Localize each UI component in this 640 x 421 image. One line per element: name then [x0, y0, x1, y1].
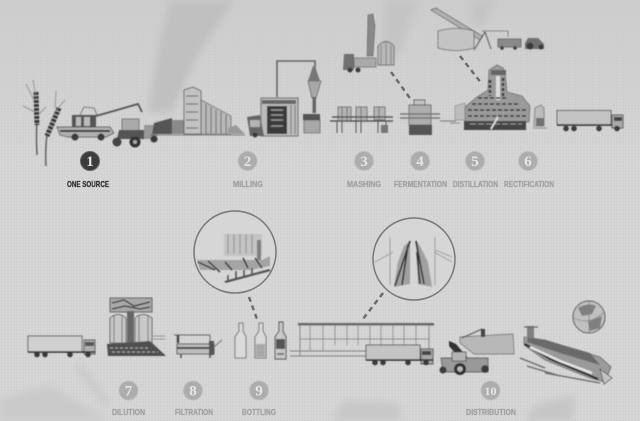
icon: labelled bottle	[275, 322, 286, 359]
step 3 badge: 3	[360, 154, 368, 170]
dashed connector: warehouse to callout	[363, 293, 383, 319]
label: distribution: DISTRIBUTION	[466, 407, 516, 417]
label: bottling: BOTTLING	[242, 407, 276, 417]
step 5 badge	[466, 152, 484, 170]
icon: grain silos	[150, 87, 245, 135]
step 2 badge	[238, 152, 257, 170]
icon: tanker truck, top row	[557, 110, 623, 131]
step 9 badge: 9	[255, 384, 263, 400]
step 10 badge: 10	[484, 384, 496, 398]
label: rectification: RECTIFICATION	[504, 179, 554, 189]
icon: truck, bottom left	[28, 336, 95, 357]
label: distillation: DISTILLATION	[453, 179, 498, 189]
label: filtration: FILTRATION	[175, 407, 213, 417]
dashed connector: bottle to callout	[249, 297, 257, 319]
top row illustrations	[23, 8, 623, 166]
icon: mill building with pipe	[247, 61, 321, 138]
label: milling: MILLING	[233, 179, 263, 189]
step 7 badge	[119, 381, 138, 400]
step 8 badge	[184, 381, 202, 400]
label: fermentation: FERMENTATION	[394, 179, 447, 189]
circle callout: warehouse racks	[373, 218, 455, 300]
icon: filtration unit	[174, 335, 222, 358]
icon: reach stacker	[440, 341, 489, 375]
icon: globe	[573, 301, 605, 333]
step 1 badge: 1	[86, 154, 94, 170]
circle callout: bottling line	[194, 211, 276, 293]
icon: wheat stalks	[23, 80, 65, 166]
step 5 badge: 5	[471, 154, 479, 170]
step 1 badge	[80, 152, 100, 170]
icon: mashing tanks	[330, 107, 393, 133]
label: mashing: MASHING	[347, 179, 381, 189]
bottom row illustrations	[28, 298, 612, 384]
step 4 badge: 4	[416, 154, 424, 170]
icon: fermentation tank	[400, 100, 456, 135]
step 10 badge	[481, 381, 500, 400]
step 7 badge: 7	[125, 384, 133, 400]
icon: tractor and trailer	[112, 119, 158, 148]
dashed connector: tower to fermentation	[391, 72, 412, 101]
step 2 badge: 2	[244, 154, 251, 170]
icon: empty bottle	[235, 323, 246, 358]
label: one source: ONE SOURCE	[67, 179, 109, 189]
step 6 badge	[518, 152, 538, 170]
icon: combine harvester	[57, 104, 142, 140]
icon: shipping container	[460, 329, 514, 354]
step 6 badge: 6	[524, 154, 532, 170]
icon: conveyor, tank and tractor	[431, 8, 544, 50]
step 3 badge	[354, 152, 374, 170]
icon: dilution tanks	[107, 298, 166, 356]
icon: warehouse	[290, 323, 434, 356]
dashed connector: tank to distillation	[460, 56, 482, 84]
label: dilution: DILUTION	[112, 407, 145, 417]
step 8 badge: 8	[189, 384, 197, 400]
icon: truck at warehouse	[366, 345, 433, 365]
step 9 badge	[250, 381, 268, 400]
icon: distillation plant	[450, 65, 547, 130]
icon: half-filled bottle	[255, 323, 266, 358]
icon: container ship	[520, 326, 612, 384]
icon: tower, tank and tanker	[343, 14, 394, 72]
step 4 badge	[410, 152, 430, 170]
